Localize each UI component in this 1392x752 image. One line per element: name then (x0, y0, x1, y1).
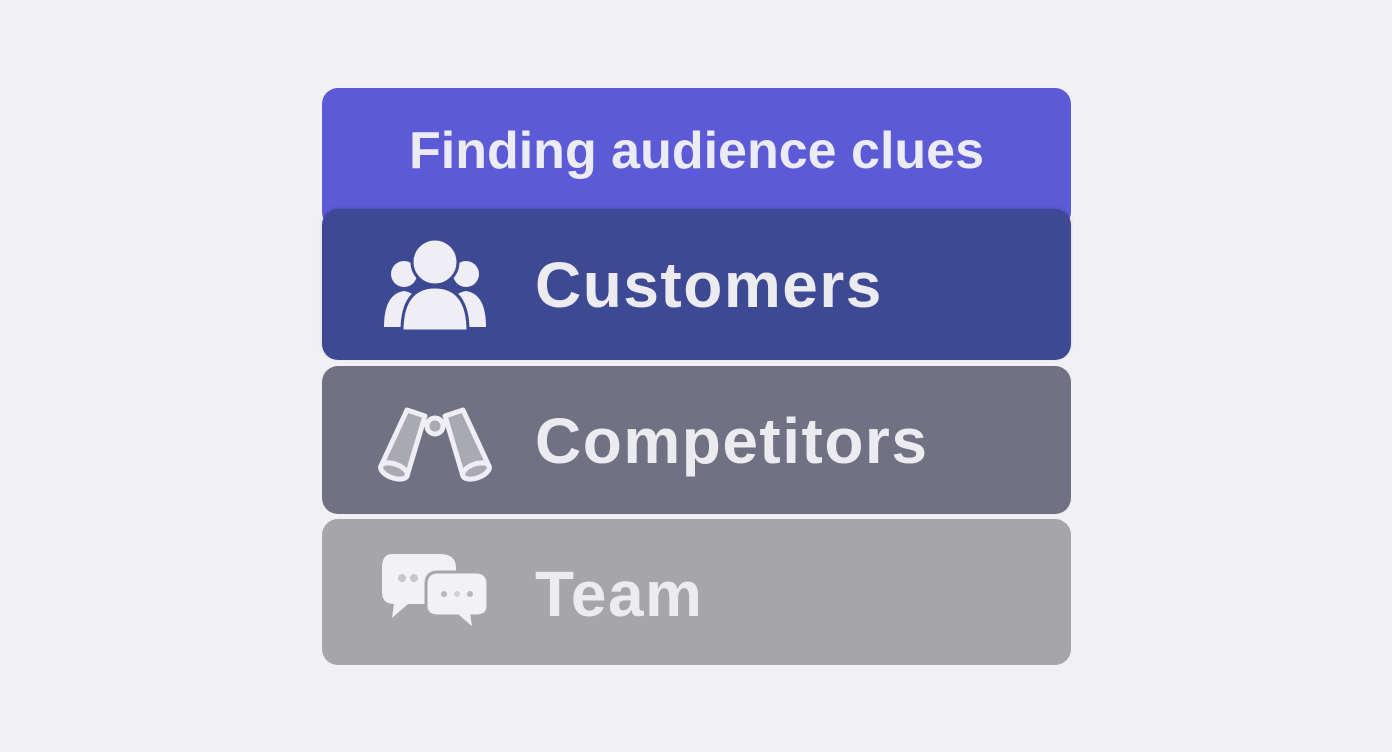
panel: competitors (322, 366, 1071, 514)
icon: people (384, 240, 486, 330)
icon: binoculars (378, 408, 492, 482)
label: Customers: Customers (535, 249, 883, 321)
icon: chat bubbles (382, 554, 486, 626)
panel: team (322, 519, 1071, 665)
header panel (322, 88, 1071, 228)
label: Competitors: Competitors (535, 405, 928, 477)
title: Finding audience clues (409, 122, 984, 180)
panel: customers (322, 209, 1071, 360)
label: Team: Team (535, 558, 703, 630)
